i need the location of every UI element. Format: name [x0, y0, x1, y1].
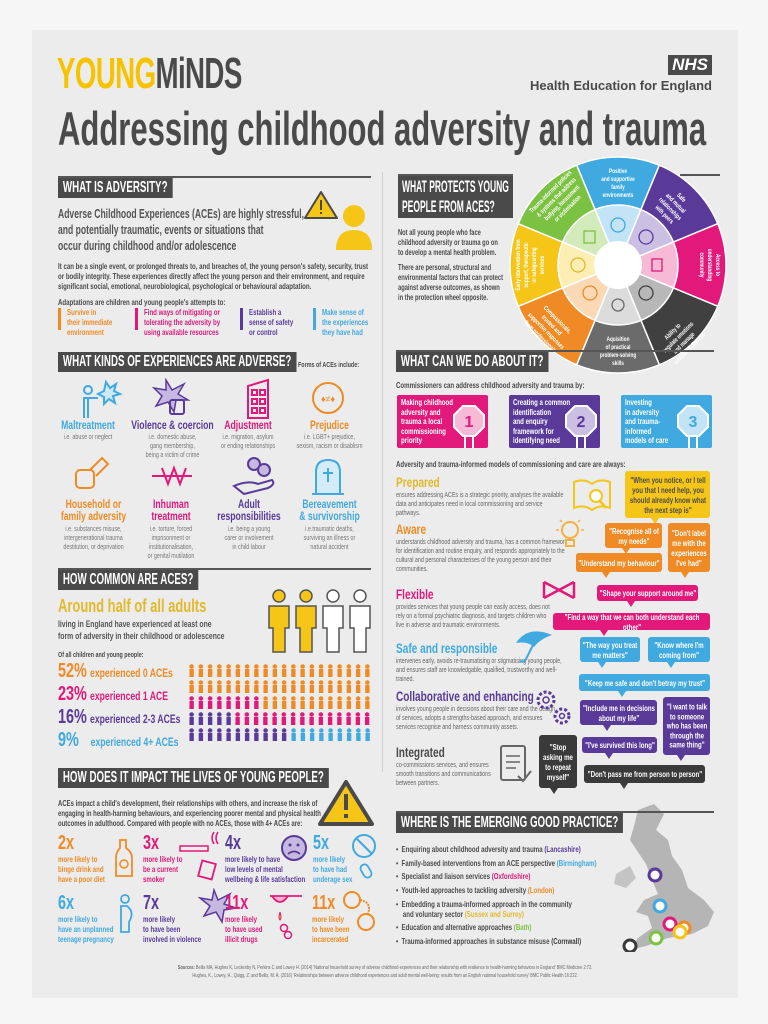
box 2: framework for [513, 426, 554, 436]
protection wheel [509, 156, 727, 374]
adaptations list: they have had [322, 327, 363, 337]
panel: kinds of experiences: Inhuman [153, 497, 189, 511]
panel: kinds of experiences: being a victim of crime [146, 450, 199, 459]
icons row 2 [75, 456, 344, 496]
labels row 2: intergenerational trauma [64, 533, 123, 542]
labels row 2: Household or [66, 497, 121, 511]
adaptations list: their immediate [67, 317, 112, 327]
stat: 4x: wellbeing & life satisfaction [225, 874, 305, 884]
stat: 11x incarcerated: 11x [312, 892, 335, 914]
text: collaborative [396, 688, 555, 731]
panel: kinds of experiences: treatment [151, 509, 191, 523]
stat: 5x: to have had [313, 864, 347, 874]
sources: Hughes, K., Lowey, H., Quigg, Z. and Bellis, M. A. (2016) 'Relationships between adverse childhood experiences and adult mental well-being: results from an English national household survey' BMC Public Health 16:222. [192, 973, 578, 979]
panel: what protects [398, 174, 513, 302]
panel: what can we do: Commissioners can address childhood adversity and trauma by: [396, 380, 584, 390]
protection wheel: & systems that address [536, 177, 578, 219]
speech bubbles: "The way you treat me matters" [583, 640, 637, 660]
heading: WHAT CAN WE DO ABOUT IT? [401, 353, 543, 370]
box 3 [621, 395, 712, 448]
stat list: 52% experienced 0 ACEs [58, 660, 173, 682]
speech bubbles: "Don't label me with the experiences I've had" [671, 528, 707, 568]
speech bubbles: "Keep me safe and don't betray my trust" [584, 678, 705, 688]
protection wheel: Safe [675, 192, 687, 204]
panel: kinds of experiences: surviving an illness or [304, 533, 355, 542]
stat: 6x: 6x [58, 892, 74, 914]
box 1 [397, 395, 488, 448]
box 1: adversity and [401, 406, 440, 416]
heading: PEOPLE FROM ACES? [402, 197, 495, 216]
panel: kinds of experiences [58, 352, 363, 560]
stat: 11x incarcerated: more likely [312, 914, 344, 924]
panel: kinds of experiences: natural accident [310, 542, 349, 551]
panel: kinds of experiences: Adjustment [224, 418, 272, 432]
panel: how common: Of all children and young people: [58, 650, 144, 659]
box 2: and enquiry [513, 416, 548, 426]
box 2: Creating a common [513, 397, 570, 407]
panel: kinds of experiences: Forms of ACEs include: [298, 360, 359, 369]
stat: 11x drugs: illicit drugs [225, 934, 258, 944]
box 3: models of care [625, 435, 668, 445]
adaptations list: tolerating the adversity by [144, 317, 220, 327]
icon: warning [318, 780, 374, 826]
stat: 3x: 3x [143, 832, 159, 854]
panel: kinds of experiences: i.e. torture, forced [150, 524, 192, 533]
intro text: ACEs impact a child's development, their relationships with others, and increase the risk of engaging in health-harming behaviours, and experiencing poorer mental and physical health outcomes in adulthood. Compared with people with no ACEs, those with 4+ ACEs are: [58, 798, 321, 828]
protection wheel: supportive responses [526, 312, 565, 351]
stat: 3x: more likely to [143, 854, 182, 864]
text [398, 228, 503, 302]
practice list: • Education and alternative approaches (Bath) [396, 922, 531, 932]
stat: 2x: binge drink and [58, 864, 104, 874]
stat: 11x incarcerated: incarcerated [312, 934, 348, 944]
panel: kinds of experiences: carer or involvement [225, 533, 273, 542]
stat: 4x [225, 832, 305, 884]
headline stat: Around half of all adults [58, 596, 206, 616]
text: prepared: ensures addressing ACEs is a strategic priority, analyses the available data and anticipates need in local commissioning and service pathways. [396, 490, 563, 517]
column divider [382, 172, 383, 772]
speech bubbles: "Shape your support around me" [599, 588, 696, 598]
box 3: Investing [625, 397, 652, 407]
stat: 7x: involved in violence [143, 934, 201, 944]
stat: 4x: 4x [225, 832, 241, 854]
people grid chart [189, 664, 370, 741]
panel: kinds of experiences: Prejudice [310, 418, 349, 432]
adaptations list: the experiences [322, 317, 368, 327]
panel: what is adversity: Adaptations are children and young people's attempts to: [58, 297, 225, 307]
icon: four people [268, 589, 371, 653]
panel: kinds of experiences: i.e. LGBT+ prejudice, [304, 432, 355, 441]
protection wheel: bullying, harassment [544, 184, 582, 222]
stat: 5x [313, 832, 352, 884]
protection wheel: Access to [714, 254, 721, 276]
panel: kinds of experiences: Bereavement [302, 497, 357, 511]
heading: WHAT PROTECTS YOUNG [402, 177, 509, 196]
protection wheel: understanding [706, 249, 713, 282]
labels row 2: family adversity [61, 509, 126, 523]
protection wheel: regulate emotions [662, 321, 696, 355]
box 2 [509, 395, 600, 448]
box 1: Making childhood [401, 397, 453, 407]
panel: kinds of experiences: or ending relationships [221, 441, 275, 450]
labels row 1 [61, 418, 115, 441]
icons row 1: ♦≠♦ [321, 394, 335, 404]
icon: gears [536, 690, 570, 724]
stat: 11x drugs [225, 892, 262, 944]
text: safe: intervenes early, avoids re-traumatising or stigmatising young people, and ensures staff are knowledgable, qualified, trustworthy and well-trained. [396, 656, 562, 683]
panel: kinds of experiences: responsibilities [217, 509, 281, 523]
box 1: trauma a local [401, 416, 442, 426]
panel: kinds of experiences: & survivorship [299, 509, 360, 523]
labels row 1: Maltreatment [61, 418, 115, 432]
labels row 1: i.e. abuse or neglect [64, 432, 112, 441]
panel: how common: form of adversity in their childhood or adolescence [58, 631, 224, 642]
icon: umbrella [516, 631, 552, 663]
stat: 6x: have an unplanned [58, 924, 113, 934]
speech bubbles: "When you notice, or I tell you that I need help, you should already know what the next step is" [629, 474, 706, 514]
protection wheel: or safeguarding [531, 247, 538, 283]
panel: kinds of experiences: institutionalisation, [149, 542, 193, 551]
speech bubbles: "Recognise all of my needs" [609, 526, 658, 546]
stat: 11x drugs: more likely [225, 914, 257, 924]
protection wheel: from professionals [523, 320, 557, 354]
stat: 6x [58, 892, 114, 944]
stat list: 23% experienced 1 ACE [58, 683, 168, 705]
protection wheel: trusted and [540, 314, 563, 338]
stat: 4x: more likely to have [225, 854, 280, 864]
box 1: priority [401, 435, 422, 445]
box 2: identification [513, 406, 551, 416]
speech bubbles: "Understand my behaviour" [578, 558, 660, 568]
speech bubbles: "Include me in decisions about my life" [583, 702, 654, 722]
adaptations list: Survive in [67, 307, 96, 317]
text: integrated: Integrated [396, 744, 445, 760]
practice list: • Embedding a trauma-informed approach in the community [396, 899, 572, 909]
icon: hourglass [542, 580, 576, 600]
protection wheel: Ability to [664, 322, 683, 342]
box 3: informed [625, 426, 651, 436]
protection wheel: family [611, 184, 625, 191]
practice list [396, 843, 634, 948]
protection wheel: community [698, 253, 705, 278]
speech bubbles: "Find a way that we can both understand each other" [564, 612, 699, 632]
sources: Sources: Bellis MA, Hughes K, Leckenby N, Perkins C and Lowey H. (2014) 'National household survey of adverse childhood experiences and their relationship with resilience to health-harming behaviors in England' BMC Medicine 2:72. [178, 965, 592, 971]
panel: how common: living in England have experienced at least one [58, 619, 212, 630]
protection wheel: problem-solving [600, 352, 637, 359]
stat: 2x: 2x [58, 832, 74, 854]
labels row 2: i.e. substances misuse, [65, 524, 122, 533]
box 3: 3 [689, 414, 698, 431]
protection wheel: and manage [672, 331, 697, 356]
stat: 7x: 7x [143, 892, 159, 914]
protection wheel: services [539, 256, 546, 274]
intro text: and potentially traumatic, events or situations that [58, 222, 263, 237]
panel: kinds of experiences: Adult [238, 497, 260, 511]
sources [178, 965, 592, 979]
stat: 5x: 5x [313, 832, 329, 854]
protection wheel: support, therapeutic [523, 242, 530, 288]
box 3: in adversity [625, 406, 659, 416]
box 1: commissioning [401, 426, 446, 436]
stat list: 9% experienced 4+ ACEs [58, 729, 178, 751]
logo: YoungMinds: YOUNGMiNDS [57, 49, 242, 98]
text: flexible: provides services that young people can easily access, does not rely on a formal psychiatric diagnosis, and targets children who live in adverse and traumatic environments. [396, 602, 550, 629]
heading [398, 176, 513, 218]
box 1: 1 [465, 414, 474, 431]
panel: kinds of experiences: i.e. migration, asylum [222, 432, 274, 441]
stat list: 16% experienced 2-3 ACEs [58, 706, 180, 728]
text: collaborative: Collaborative and enhancing [396, 688, 534, 704]
speech bubbles: "Stop asking me to repeat myself" [543, 742, 573, 782]
practice list: • Specialist and liaison services (Oxfordshire) [396, 871, 530, 881]
stat: 2x: more likely to [58, 854, 97, 864]
text: prepared: Prepared [396, 474, 440, 490]
protection wheel: Early intervention from [515, 239, 522, 291]
paragraph: It can be a single event, or prolonged threats to, and breaches of, the young person's safety, security, trust or bodily integrity. These experiences directly affect the young person and their environment, and require significant social, emotional, neurobiological, psychological or behavioural adaptation. [58, 261, 368, 291]
labels row 2 [61, 497, 126, 551]
text: safe [396, 640, 562, 683]
logo: NHS: Health Education for England [530, 78, 712, 93]
stat list [58, 660, 180, 751]
protection wheel: Compassionate, [542, 305, 572, 336]
box 2: identifying need [513, 435, 560, 445]
panel: what can we do [396, 350, 714, 448]
stat: 7x [143, 892, 201, 944]
panel: kinds of experiences: imprisonment or [152, 533, 190, 542]
icon: warning and person [304, 191, 372, 250]
stat: 7x: to have been [143, 924, 180, 934]
intro text [58, 206, 304, 253]
protection wheel: relationships [657, 197, 682, 222]
stat: 3x: be a current [143, 864, 178, 874]
protection wheel: Trauma-informed policies [529, 170, 574, 215]
title: Addressing childhood adversity and trauma [58, 102, 706, 155]
text: safe: Safe and responsible [396, 640, 497, 656]
panel: kinds of experiences: in child labour [232, 542, 266, 551]
text: Not all young people who face childhood adversity or trauma go on to develop a mental health problem. [398, 228, 498, 257]
text: integrated: co-commissions services, and ensures smooth transitions and communications between partners. [396, 760, 491, 787]
stat: 5x: underage sex [313, 874, 352, 884]
speech bubbles [538, 470, 713, 790]
adaptations list: using available resources [144, 327, 219, 337]
stat: 11x incarcerated [312, 892, 349, 944]
protection wheel: and supportive [601, 176, 635, 183]
icon: book [573, 479, 611, 512]
panel: kinds of experiences: or genital mutilation [148, 551, 194, 560]
text: flexible: Flexible [396, 586, 434, 602]
adaptations list: Establish a [249, 307, 281, 317]
intro text: occur during childhood and/or adolescence [58, 238, 236, 253]
text: prepared [396, 474, 564, 517]
logo: NHS [530, 55, 712, 93]
heading: HOW DOES IT IMPACT THE LIVES OF YOUNG PEOPLE? [63, 769, 324, 786]
adaptations list: environment [67, 327, 104, 337]
text: collaborative: involves young people in decisions about their care and the design of services, adopts a strengths-based approach, and ensures services recognise and harness community assets. [396, 704, 555, 731]
panel: kinds of experiences: i.e. domestic abuse, [148, 432, 197, 441]
icons row 1 [83, 378, 344, 419]
protection wheel: of practical [606, 344, 631, 351]
panel: emerging good practice [396, 811, 716, 951]
panel: impact [58, 768, 376, 944]
heading: WHERE IS THE EMERGING GOOD PRACTICE? [401, 814, 618, 831]
icon: clipboard [498, 742, 534, 786]
labels row 2: destitution, or deprivation [63, 542, 124, 551]
box 3: and trauma- [625, 416, 660, 426]
adaptations list: Make sense of [322, 307, 364, 317]
protection wheel: emotional distress [673, 332, 707, 366]
stat: 2x [58, 832, 105, 884]
protection wheel: skills [612, 360, 624, 367]
stat: 2x: have a poor diet [58, 874, 105, 884]
panel: kinds of experiences: i.e. being a young [228, 524, 270, 533]
practice list: • Trauma-informed approaches in substance misuse (Cornwall) [396, 936, 581, 946]
text: integrated [396, 744, 506, 787]
protection wheel: or victimisation [554, 194, 583, 224]
intro text: Adverse Childhood Experiences (ACEs) are highly stressful, [58, 206, 304, 221]
text: Adversity and trauma-informed models of commissioning and care are always: [396, 459, 626, 469]
practice list: • Youth-led approaches to tackling adversity (London) [396, 884, 554, 894]
protection wheel: with peers [653, 204, 674, 226]
text: aware: understands childhood adversity and trauma, has a common framework for identification and routine enquiry, and responds appropriately to the cultural and personal characterises of the young person and their communities. [396, 537, 567, 573]
speech bubbles: "Know where I'm coming from" [654, 640, 704, 660]
map: UK [608, 800, 728, 952]
text: aware: Aware [396, 521, 426, 537]
icon: lightbulb [556, 520, 584, 547]
stat: 3x: smoker [143, 874, 165, 884]
protection wheel: Aquisition [607, 336, 630, 343]
stat: 11x drugs: to have used [225, 924, 262, 934]
protection wheel: environments [603, 192, 633, 199]
stat: 6x: teenage pregnancy [58, 934, 114, 944]
heading: WHAT KINDS OF EXPERIENCES ARE ADVERSE? [63, 353, 291, 370]
speech bubbles: "I want to talk to someone who has been through the same thing" [666, 701, 707, 749]
logo: NHS: NHS [672, 55, 708, 74]
adaptations list: sense of safety [249, 317, 293, 327]
panel: kinds of experiences: Violence & coercion [131, 418, 214, 432]
speech bubbles: "I've survived this long" [585, 740, 654, 750]
heading: WHAT IS ADVERSITY? [63, 179, 168, 196]
protection wheel: Positive [609, 168, 627, 175]
box 2: 2 [577, 414, 586, 431]
panel: what is adversity [58, 176, 372, 337]
stat: 11x drugs: 11x [225, 892, 248, 914]
panel: kinds of experiences: gang membership, [150, 441, 195, 450]
stat: 11x incarcerated: to have been [312, 924, 349, 934]
practice list: • Enquiring about childhood adversity and trauma (Lancashire) [396, 844, 581, 854]
stat: 6x: more likely to [58, 914, 97, 924]
stat: 4x: low levels of mental [225, 864, 283, 874]
text: aware [396, 521, 568, 573]
panel: how common [58, 568, 371, 751]
text: flexible [396, 586, 550, 629]
stat: 5x: more likely [313, 854, 345, 864]
practice list: and voluntary sector (Sussex and Surrey) [403, 909, 524, 919]
protection wheel: and mutual [664, 193, 687, 215]
adaptations list [58, 307, 368, 337]
stat: 3x [143, 832, 182, 884]
heading: HOW COMMON ARE ACES? [63, 571, 193, 588]
adaptations list: Find ways of mitigating or [144, 307, 220, 317]
speech bubbles: "Don't pass me from person to person" [587, 769, 702, 779]
stat: 7x: more likely [143, 914, 175, 924]
text: There are personal, structural and environmental factors that can protect against adverse outcomes, as shown in the protection wheel opposite. [398, 263, 503, 302]
practice list: • Family-based interventions from an ACE perspective (Birmingham) [396, 858, 597, 868]
panel: kinds of experiences: i.e.traumatic deaths, [305, 524, 354, 533]
adaptations list: or control [249, 327, 278, 337]
panel: kinds of experiences: sexism, racism or disablism [296, 441, 363, 450]
